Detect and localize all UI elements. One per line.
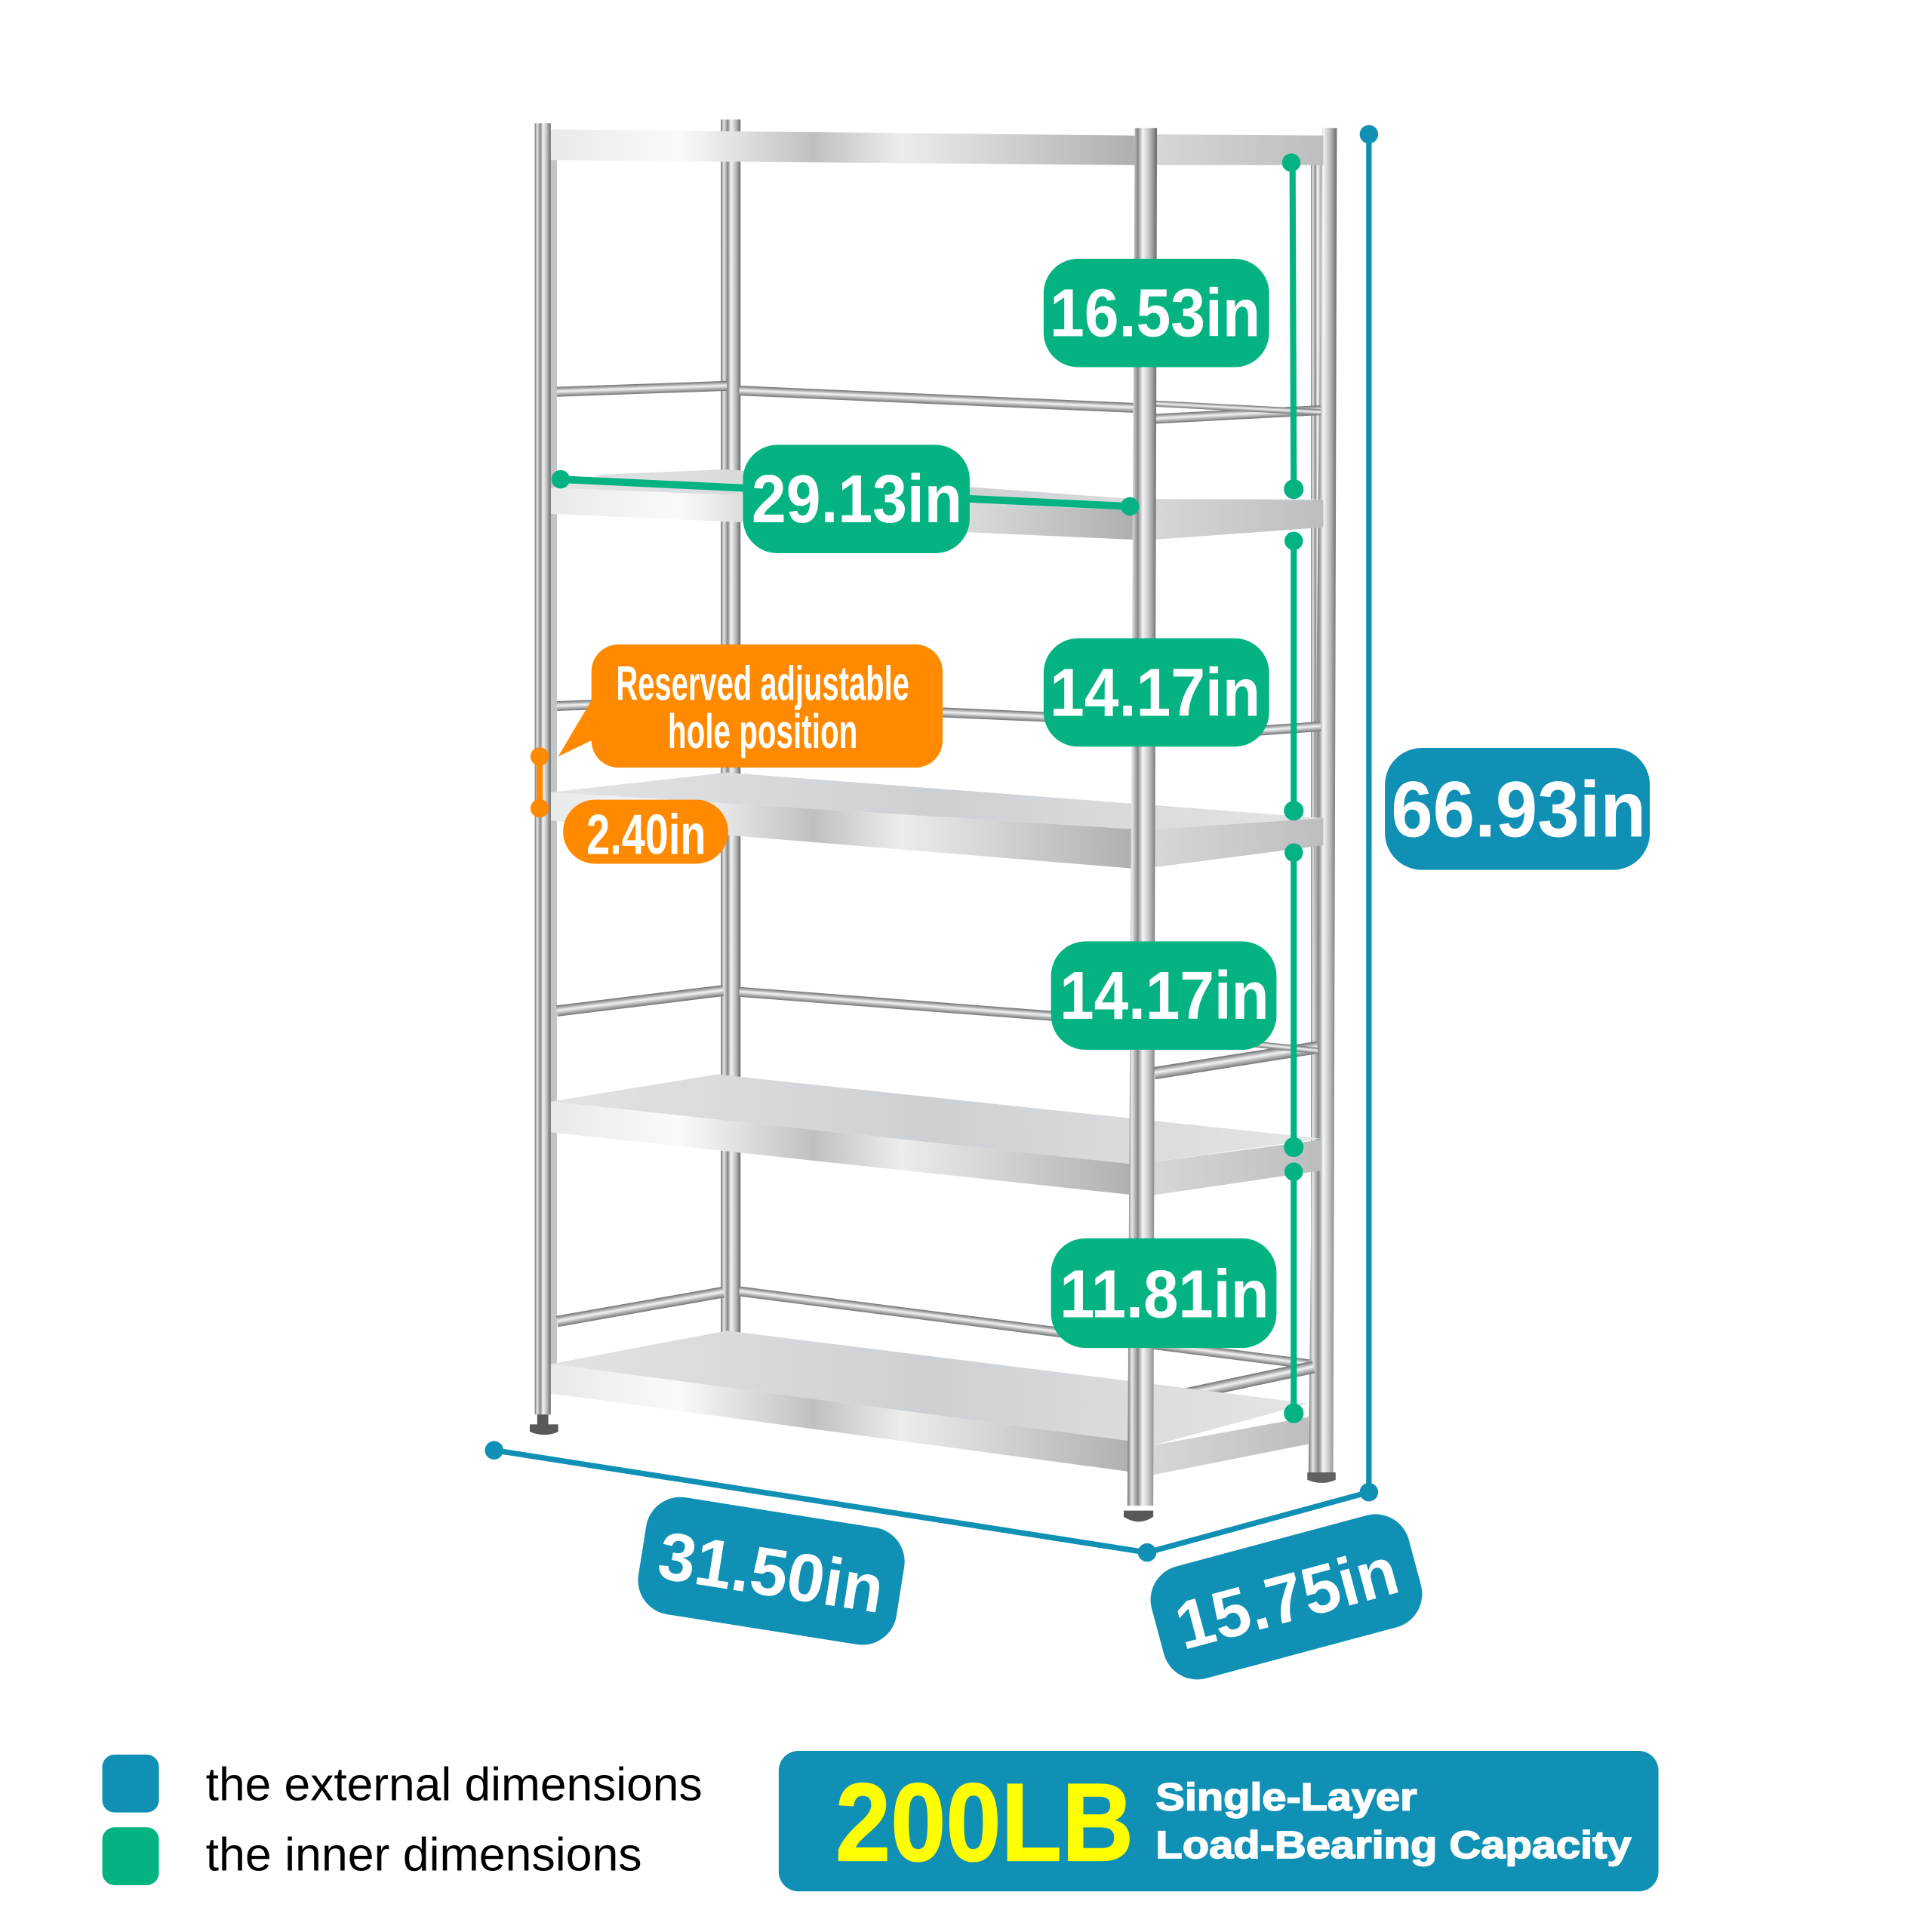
label: 14.17in upper [1044,638,1269,746]
label: 29.13in [743,445,970,553]
rods: level 3 [556,985,1318,1079]
callout: reserved adjustable hole position [558,645,943,768]
foot: front left [530,1414,558,1435]
capacity figure: 200LB [835,1761,1134,1884]
inner slim posts [549,154,1323,1411]
label: 31.50in width: 31.50in [653,1518,889,1628]
top band [551,129,1323,165]
label: 14.17in upper: 14.17in [1050,656,1260,731]
capacity caption [1155,1775,1632,1866]
rods: level 2 [557,695,1321,743]
label: 31.50in width [633,1492,909,1650]
label: 11.81in: 11.81in [1060,1257,1269,1332]
capacity caption: Single-Layer [1155,1775,1417,1818]
orange dimension marker [531,747,549,817]
external dimension lines [485,125,1378,1561]
label: 29.13in: 29.13in [752,462,962,537]
label: 14.17in lower [1051,941,1276,1050]
label: 15.75in depth: 15.75in [1168,1533,1406,1665]
label: 16.53in: 16.53in [1050,276,1260,352]
label: 15.75in depth [1143,1506,1430,1687]
load capacity banner [779,1751,1659,1891]
rods: level 4 [556,1287,1315,1407]
shelf 5 [551,1331,1309,1475]
callout: reserved adjustable hole position: Reserved adjustable [616,657,909,710]
label: 14.17in lower: 14.17in [1060,958,1269,1034]
label: 66.93in height [1385,748,1650,870]
label: 11.81in [1051,1238,1276,1348]
stainless steel shelving unit [530,119,1337,1521]
front left post [535,123,551,1414]
legend: inner dimensions: the inner dimensions [206,1829,642,1881]
label: 16.53in [1044,259,1269,368]
shelf 3 [551,773,1323,869]
capacity caption: Load-Bearing Capacity [1155,1823,1632,1866]
label: 2.40in: 2.40in [586,802,706,866]
shelf 2 [551,469,1323,540]
front right post [1128,128,1157,1506]
shelf 4 [551,1075,1321,1195]
inner dimension lines [552,153,1303,1423]
legend: external dimensions: the external dimensions [206,1758,703,1810]
foot: back right [1307,1472,1336,1483]
rods: level 1 [557,381,1321,424]
back right post [1309,128,1337,1472]
foot: front right [1124,1511,1153,1521]
callout: reserved adjustable hole position: hole position [668,705,857,758]
back left post [721,119,740,1334]
label: 66.93in height: 66.93in [1391,766,1646,854]
